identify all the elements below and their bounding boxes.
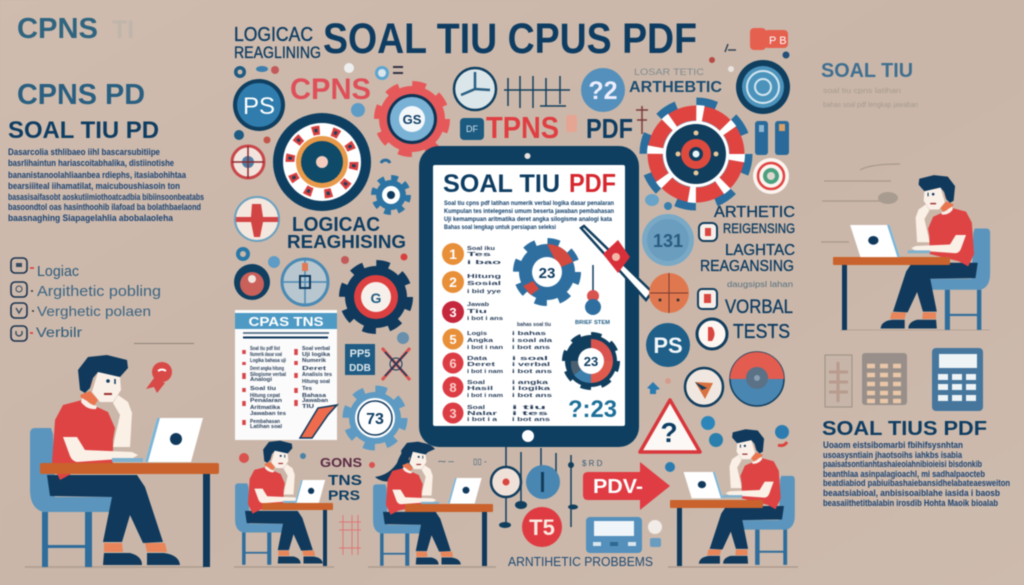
item 1 <box>442 243 501 266</box>
item 5: i bot ans <box>512 369 552 375</box>
laptop <box>684 472 723 498</box>
icon: orange circle <box>649 273 689 313</box>
icon: navy gear: G <box>371 290 382 306</box>
icon: crossed tools <box>382 348 410 380</box>
document list: Silogisme verbal <box>250 372 287 378</box>
item 7: i bot ans <box>512 417 550 423</box>
legend row: Verbilr <box>11 324 82 341</box>
icon: small marks: ▯▯ - <box>473 457 487 466</box>
icon: pen <box>581 226 652 315</box>
item 2 <box>442 271 502 295</box>
panel: right column <box>821 60 1010 509</box>
icon: small bubbles <box>236 247 408 268</box>
document list: Hitung cepat <box>250 393 280 399</box>
icon: red square 2 <box>698 289 717 309</box>
tablet heading: SOAL TIU <box>443 170 560 198</box>
label: Logicac Reaglining top: REAGLINING <box>234 43 321 62</box>
item 2: 2 <box>449 274 457 290</box>
legend row: Verbilr: Verbilr <box>36 324 82 340</box>
item 5: 6 <box>449 356 457 371</box>
divider line <box>134 342 194 344</box>
text block: left paragraph <box>8 147 204 224</box>
label: Arthebtic: LOSAR TETIC <box>634 67 705 77</box>
item 5: Data <box>467 356 487 362</box>
icon: red grid chart <box>339 515 361 555</box>
legend: checklist <box>11 258 161 341</box>
person <box>373 442 461 566</box>
item 3: Jawab <box>467 302 489 308</box>
document list: Penalaran <box>250 398 282 404</box>
item 4: i bot ans <box>512 345 550 351</box>
icon: red D circle <box>697 319 727 349</box>
person <box>235 441 323 565</box>
icon: red gear GS: GS <box>403 112 422 127</box>
tablet intro text <box>444 201 614 231</box>
tablet intro text: Bahas soal lengkap untuk persiapan seleksi <box>444 225 556 231</box>
icon: device <box>586 517 642 553</box>
arrow: PDV <box>583 462 670 510</box>
item 6: i logika <box>512 386 550 392</box>
document list: Aritmatika <box>250 405 280 411</box>
icon: blue dial <box>526 465 560 499</box>
icon: end caps <box>499 462 578 528</box>
document list: Latihan soal <box>250 424 283 430</box>
icon: avatar circle <box>234 264 270 300</box>
document list: Soal tiu <box>250 386 276 392</box>
badge: PPS PDB: DDB <box>349 363 371 374</box>
laptop <box>448 478 482 504</box>
icon: warning triangle: ? <box>660 417 678 448</box>
label: Gons Tns Prs <box>320 455 362 503</box>
icon: half pie <box>730 352 784 406</box>
icon: warning triangle <box>640 400 700 452</box>
item 7: 3 <box>449 406 457 421</box>
label: Laghtac Reagansing: LAGHTAC <box>725 242 795 259</box>
icon: plane badge <box>235 197 279 241</box>
label: Logicac Reaglining top: LOGICAC <box>234 24 313 46</box>
item 7: Soal <box>467 405 486 411</box>
document list: Logika bahasa uji <box>250 358 287 364</box>
label: Arthetic Reigensing <box>714 204 795 236</box>
text block: left paragraph: basrlihaintun hariascoitabhalika, distiinotishe <box>8 158 174 169</box>
person <box>881 175 990 330</box>
item 6: i angka <box>512 380 548 386</box>
item 6 <box>442 376 552 399</box>
text block: right paragraph: Uoaom eistsibomarbi fbihifsysnhtan <box>823 440 963 451</box>
item 7: Nalar <box>467 411 497 417</box>
desk <box>833 257 950 330</box>
item 2: Sosial <box>467 281 502 287</box>
icon: 131 circle <box>642 214 694 266</box>
legend row: Logiac <box>11 258 79 280</box>
document bullets <box>244 349 296 425</box>
text block: right paragraph: usoasysntiain jhaotsoihs iahkbs isabia <box>823 450 963 461</box>
document list: Jawaban tes <box>250 411 286 417</box>
icon: bullseye <box>753 158 789 194</box>
badge: PPS PDB <box>345 344 375 375</box>
pencil corner <box>300 405 337 438</box>
icon: hanging mark <box>636 106 648 134</box>
label: TPNS: TPNS <box>486 110 559 145</box>
icon: red gear GS <box>378 85 446 153</box>
icon: grey calculator <box>862 353 907 405</box>
legend row: Verghetic polaen: Verghetic polaen <box>37 303 151 319</box>
item 6: i bot i nam <box>467 393 504 399</box>
icon: blue tiles <box>755 121 789 155</box>
tablet intro text: Uji kemampuan aritmatika deret angka silogisme analogi kata <box>444 217 613 223</box>
icon: question drop <box>581 68 625 112</box>
desk <box>670 500 763 566</box>
badge: PPS PDB: PP5 <box>350 348 370 360</box>
document list: Uji logika <box>302 352 330 358</box>
arrow: PDV: PDV- <box>593 476 643 498</box>
label: Logicac Reaghising: LOGICAC <box>292 214 380 236</box>
scene: student facing left <box>668 429 798 567</box>
label: PDF: PDF <box>586 113 633 144</box>
text block: left paragraph: bearsiiiteal iihamatilat, maicuboushiasoin ton <box>8 181 180 192</box>
item 5: i bot i nam <box>467 369 504 375</box>
faded text: soal tiu cpns latihan <box>823 88 901 95</box>
panel: tablet <box>419 146 652 447</box>
icon: small marks: ⁓ ─ <box>438 457 454 466</box>
laptop <box>295 480 325 503</box>
item 3: Tiu <box>467 309 487 315</box>
person <box>30 355 180 567</box>
icon: question drop: ?2 <box>588 77 618 105</box>
tablet heading: PDF: PDF <box>569 168 616 198</box>
icon: red tags <box>750 28 788 50</box>
faded text <box>823 88 918 109</box>
label: Laghtac Reagansing <box>700 242 795 275</box>
icon: crosshair <box>232 146 264 178</box>
icon: misc dots <box>709 44 790 72</box>
text block: left paragraph: basasisaifasobt aoskutiimiothoatcadbia bibiinsoonbeatabs <box>8 192 204 203</box>
caption: Arithmetic problems: ARNTIHETIC PROBBEMS <box>508 554 653 569</box>
item 5: i verbal <box>512 362 551 368</box>
item 4: Logis <box>467 331 487 337</box>
item 6: Soal <box>467 380 486 386</box>
document header: CPAS TNS <box>248 314 324 329</box>
document list: Pembahasan <box>250 419 280 425</box>
panel: document sheet <box>235 310 337 440</box>
icon: compass <box>282 259 328 305</box>
icon: small dots <box>239 453 375 468</box>
icon: large ring gear <box>273 113 371 211</box>
panel: left text column <box>8 13 204 341</box>
label: Arthebtic: ARTHEBTIC <box>629 79 722 96</box>
label: Logicac Reaglining top <box>234 24 321 62</box>
badge: T5: T5 <box>529 515 555 540</box>
icon: blue gear <box>374 178 408 212</box>
heading: CPNS PD: CPNS PD <box>17 79 145 111</box>
document list: Deret <box>302 366 327 372</box>
icon: faded calculator <box>825 355 852 407</box>
document list: Soal verbal <box>302 346 331 352</box>
gear 23 bottom <box>565 335 617 387</box>
document list <box>250 346 332 430</box>
scene: small student <box>234 441 334 567</box>
item 4: i soal ala <box>512 338 552 344</box>
gear 23 top: 23 <box>539 265 555 282</box>
icon: CPNS badge <box>460 118 484 140</box>
icon: small marks: $ R D <box>582 459 603 468</box>
icon: blue calculator <box>932 348 983 411</box>
tablet camera <box>524 153 530 159</box>
label: Logicac Reaghising <box>287 214 406 252</box>
text block: left paragraph: baasnaghing Siapagelahlia abobalaoleha <box>8 213 174 224</box>
item 3: 3 <box>449 305 457 320</box>
document list: Analogi <box>250 377 273 383</box>
document list: Deret angka hitung <box>250 366 284 372</box>
badge: T5 <box>522 507 562 547</box>
gear 23 top <box>517 242 577 302</box>
scene: large student <box>25 344 219 567</box>
label: Laghtac Reagansing: REAGANSING <box>700 258 794 275</box>
document list: TIU <box>302 404 315 410</box>
document list: Analisis tes <box>302 372 332 378</box>
icon: target <box>736 60 790 114</box>
label: Logicac Reaghising: REAGHISING <box>287 232 406 252</box>
icon: light mug <box>648 520 662 547</box>
faded text: bahas soal pdf lengkap jawaban <box>823 102 918 109</box>
label: CPNS red: CPNS <box>290 73 371 106</box>
heading: CPNS faded: CPNS <box>17 13 98 45</box>
small captions: BRIEF STEM <box>575 320 610 326</box>
icon: thought bubbles <box>665 416 789 472</box>
desk <box>40 463 219 567</box>
label: Gons Tns Prs: GONS <box>320 455 362 470</box>
tablet body <box>419 146 639 447</box>
faded lines <box>821 164 900 242</box>
item 6: i bot ans <box>512 393 552 399</box>
document list: Bahasa <box>302 393 326 399</box>
icon: small dial <box>491 467 521 497</box>
text block: left paragraph: basoondtol oas hasinthoohib ilafoad ba bolathbaelaond <box>8 202 201 213</box>
title: SOAL TIU CPUS PDF <box>323 15 697 63</box>
icon: small blue drop <box>397 332 409 344</box>
timer: 7:23: ?:23 <box>568 396 617 423</box>
item 5 <box>442 352 552 375</box>
hanging icons below tablet <box>438 447 603 528</box>
icon cluster: top left <box>232 63 446 329</box>
icon: line chart <box>504 76 570 108</box>
item 2: i bid yye <box>467 289 501 295</box>
label: Gons Tns Prs: TNS <box>328 472 362 489</box>
item 1: i bao <box>467 260 501 266</box>
item 3: i bot i ans <box>467 316 503 322</box>
legend row: Argithetic pobling: Argithetic pobling <box>37 283 161 300</box>
tablet intro text: Kumpulan tes intelegensi umum beserta jawaban pembahasan <box>444 209 614 215</box>
small captions <box>517 320 610 328</box>
desk <box>405 504 493 566</box>
item 4: i bot i nan <box>467 345 503 351</box>
item 2: Hitung <box>467 274 501 280</box>
document list: Soal tiu pdf list <box>250 346 280 352</box>
tablet home button <box>522 430 534 442</box>
label: Arthebtic <box>629 67 722 96</box>
icon: small blobs <box>234 63 403 163</box>
item 6: Hasil <box>467 386 494 392</box>
text block: left paragraph: Dasarcolia sthlibaeo iihl bascarsubitiipe <box>8 147 160 158</box>
icon: CPNS badge: DF <box>466 124 478 134</box>
item 7 <box>442 402 550 424</box>
item 1: Tes <box>467 252 492 258</box>
icon: red square <box>699 223 717 241</box>
item 4 <box>442 328 552 351</box>
item 5: Deret <box>467 362 496 368</box>
ground shadow <box>25 566 205 568</box>
document list: Numerik <box>302 358 326 364</box>
icon: PS circle: PS <box>653 333 683 358</box>
heading: Soal TIU: SOAL TIU <box>821 60 913 82</box>
item 4: 5 <box>449 332 457 347</box>
icon: PS badge: PS <box>243 93 275 120</box>
label: Arthetic Reigensing: ARTHETIC <box>714 204 795 221</box>
icon: compass clock <box>685 368 723 406</box>
label: Vorbal Tests: VORBAL <box>725 297 793 318</box>
icon: large red gear <box>645 103 747 205</box>
icon: 131 circle: 131 <box>653 231 683 251</box>
icon: small arrows <box>647 378 671 394</box>
person <box>699 429 795 565</box>
document list: Tes <box>302 386 312 392</box>
icon: PS badge <box>233 79 285 131</box>
long hair <box>375 443 435 481</box>
item 7: i bot i a <box>467 417 497 423</box>
heading: Soal Tius PDF: SOAL TIUS PDF <box>822 418 987 440</box>
speech blob <box>146 362 172 393</box>
item 6: 8 <box>449 380 457 395</box>
item 3 <box>442 301 503 323</box>
icon: small badge <box>566 115 577 132</box>
label: Vorbal Tests: TESTS <box>733 321 790 343</box>
item 4: i bahas <box>512 331 546 337</box>
item 1: 1 <box>449 246 457 262</box>
tablet screen <box>433 165 625 426</box>
text block: right paragraph: beaatsiabioal, anbisisoaiblahe iasida i baosb <box>823 488 1000 499</box>
text block: right paragraph: beanthlaa asinpalagioachl, mi sadhalpaocteb <box>823 469 985 480</box>
icon: clock <box>454 68 496 110</box>
desk <box>262 503 333 566</box>
item 7: i tes <box>512 411 549 417</box>
label: Gons Tns Prs: PRS <box>328 487 360 503</box>
item 1: Soal iku <box>467 246 495 252</box>
laptop <box>850 225 900 257</box>
icon: small blue blobs <box>645 194 672 210</box>
item 4: Angka <box>467 338 493 344</box>
heading fade: TI: TI <box>112 16 134 44</box>
icon: red tags: P B <box>769 35 787 47</box>
icon: small marks <box>438 457 603 468</box>
icon: blue gear 73 <box>346 389 404 447</box>
item 5: i soal <box>512 356 550 362</box>
legend row: Logiac: Logiac <box>37 263 79 280</box>
text block: left paragraph: bananistanoolahliaanbea rdiephs, itasiabohihtaa <box>8 170 187 181</box>
small captions: bahas soal tiu <box>517 322 551 328</box>
item 7: i tiu <box>512 405 546 411</box>
icon cluster: top centre and right <box>454 28 795 472</box>
numbered list <box>442 243 552 424</box>
scene: right student <box>833 175 990 330</box>
icon: blue gear 73: 73 <box>366 411 384 428</box>
caption: tiny: daugsipsl lahan <box>727 280 793 289</box>
label: Arthetic Reigensing: REIGENSING <box>723 220 795 236</box>
faded smudge <box>878 192 898 204</box>
text block: right paragraph <box>823 440 1010 509</box>
gear 23 bottom: 23 <box>584 354 598 369</box>
document list: Numerik dasar soal <box>250 352 282 358</box>
icon: PS circle <box>646 323 690 367</box>
label: Vorbal Tests <box>725 297 793 343</box>
document list: Jawaban <box>302 398 328 404</box>
tablet intro text: Soal tiu cpns pdf latihan numerik verbal logika dasar penalaran <box>444 201 614 207</box>
heading: SOAL TIU PD: SOAL TIU PD <box>8 117 159 144</box>
laptop <box>145 418 203 462</box>
document list: Hitung soal <box>302 379 331 385</box>
scene: student with long hair <box>368 442 496 567</box>
icon: navy gear <box>344 265 408 329</box>
